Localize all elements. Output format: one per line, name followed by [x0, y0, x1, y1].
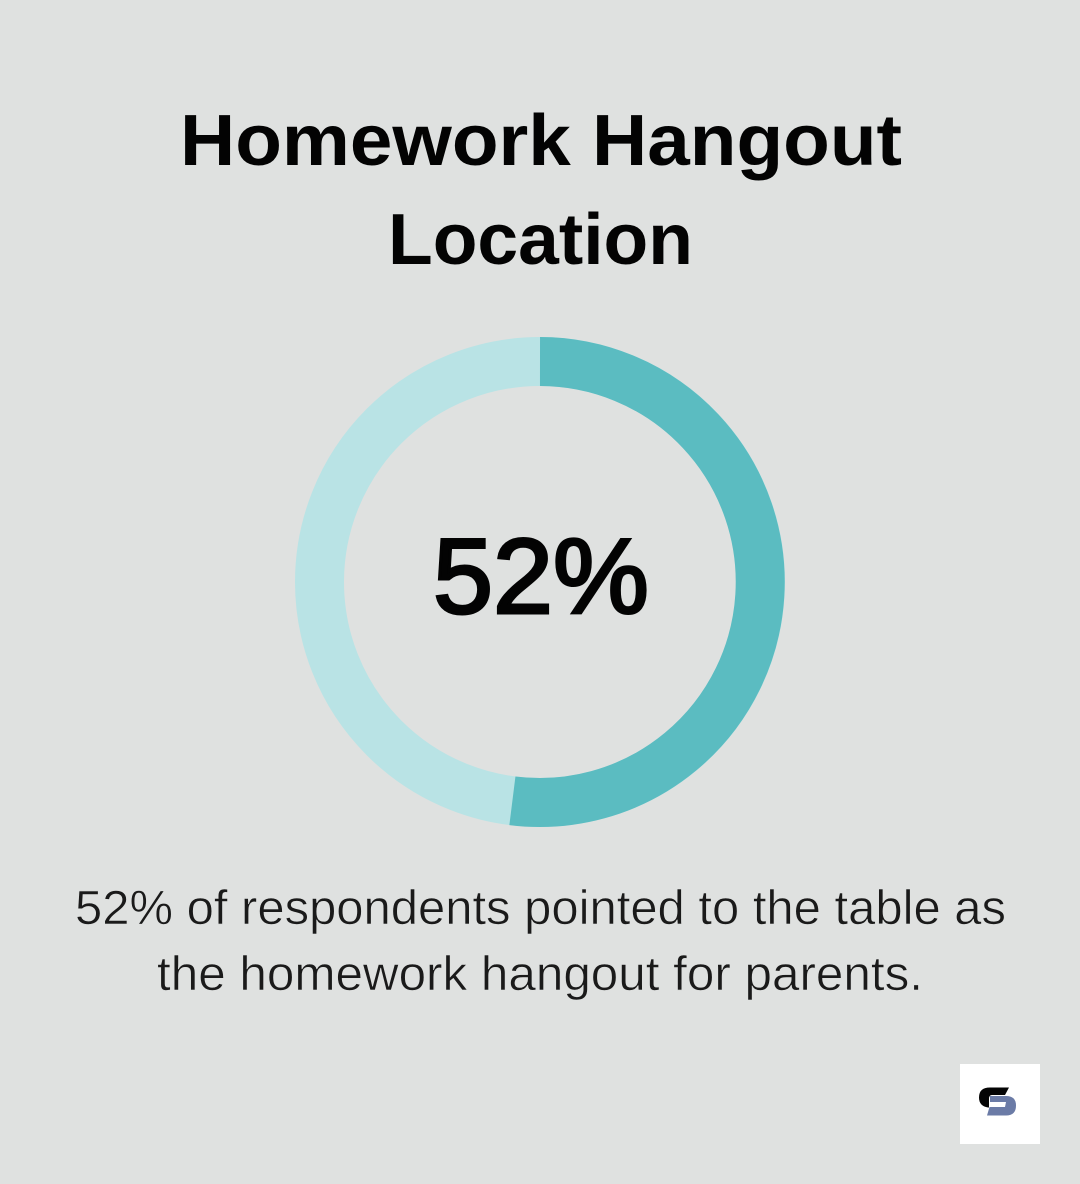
- description: [75, 882, 1006, 1001]
- title: Location: [388, 200, 693, 280]
- donut chart: [320, 362, 760, 802]
- logo mark: blue part: [987, 1096, 1016, 1116]
- description: 52% of respondents pointed to the table as: [75, 882, 1006, 935]
- title: [180, 101, 902, 280]
- description: the homework hangout for parents.: [157, 948, 923, 1001]
- donut 52% segment: [512, 362, 760, 802]
- logo mark: black part: [979, 1088, 1009, 1108]
- title: Homework Hangout: [180, 101, 902, 181]
- logo badge: [960, 1064, 1040, 1144]
- donut remainder segment: [320, 362, 760, 802]
- center value: 52%: [433, 516, 649, 636]
